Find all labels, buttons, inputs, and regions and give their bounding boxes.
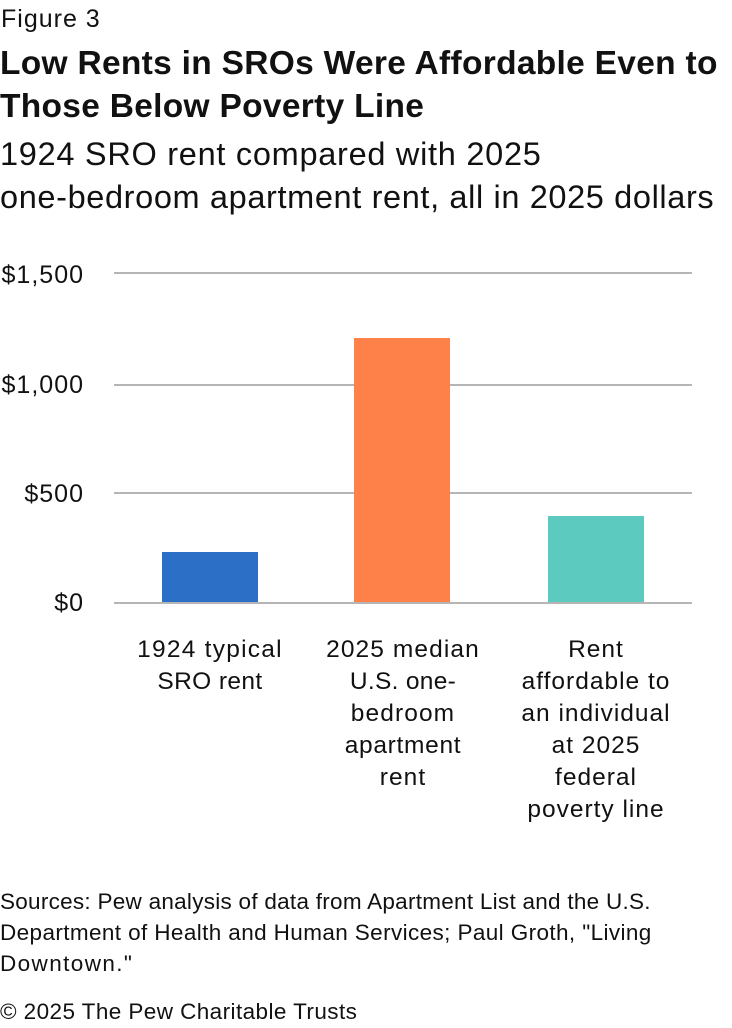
bar: 2025 median rent — [354, 338, 450, 602]
category label 3: an individual — [521, 700, 671, 727]
category label 2: apartment — [345, 732, 461, 759]
title — [0, 45, 718, 125]
bar: affordable rent — [548, 516, 644, 602]
category label 2: rent — [380, 764, 426, 791]
title: Low Rents in SROs Were Affordable Even to — [0, 45, 718, 82]
sources: Downtown." — [0, 951, 133, 976]
category label 2: 2025 median — [326, 636, 480, 663]
category label 3: poverty line — [527, 796, 665, 823]
category label 3: Rent — [568, 636, 624, 663]
category label 3 — [521, 636, 671, 823]
y axis labels: $1,500 — [2, 261, 84, 289]
sources — [0, 889, 652, 976]
subtitle — [0, 136, 714, 215]
sources: Department of Health and Human Services; Paul Groth, "Living — [0, 920, 652, 945]
category label 2 — [326, 636, 480, 791]
category label 2: U.S. one- — [350, 668, 456, 695]
category label 1: SRO rent — [157, 668, 263, 695]
y axis labels: $0 — [54, 589, 84, 617]
category label 1: 1924 typical — [137, 636, 283, 663]
sources: Sources: Pew analysis of data from Apartment List and the U.S. — [0, 889, 651, 914]
category label 1 — [137, 636, 283, 695]
subtitle: one-bedroom apartment rent, all in 2025 dollars — [0, 179, 714, 215]
copyright: © 2025 The Pew Charitable Trusts — [0, 999, 357, 1024]
y axis labels — [2, 261, 84, 617]
category label 2: bedroom — [351, 700, 455, 727]
category label 3: affordable to — [522, 668, 670, 695]
y axis labels: $500 — [24, 480, 84, 508]
title: Those Below Poverty Line — [0, 88, 424, 125]
subtitle: 1924 SRO rent compared with 2025 — [0, 136, 542, 172]
bar chart — [2, 261, 692, 823]
figure label: Figure 3 — [1, 5, 101, 33]
category label 3: federal — [555, 764, 637, 791]
category label 3: at 2025 — [552, 732, 640, 759]
bar: 1924 SRO rent — [162, 552, 258, 602]
y axis labels: $1,000 — [2, 371, 84, 399]
